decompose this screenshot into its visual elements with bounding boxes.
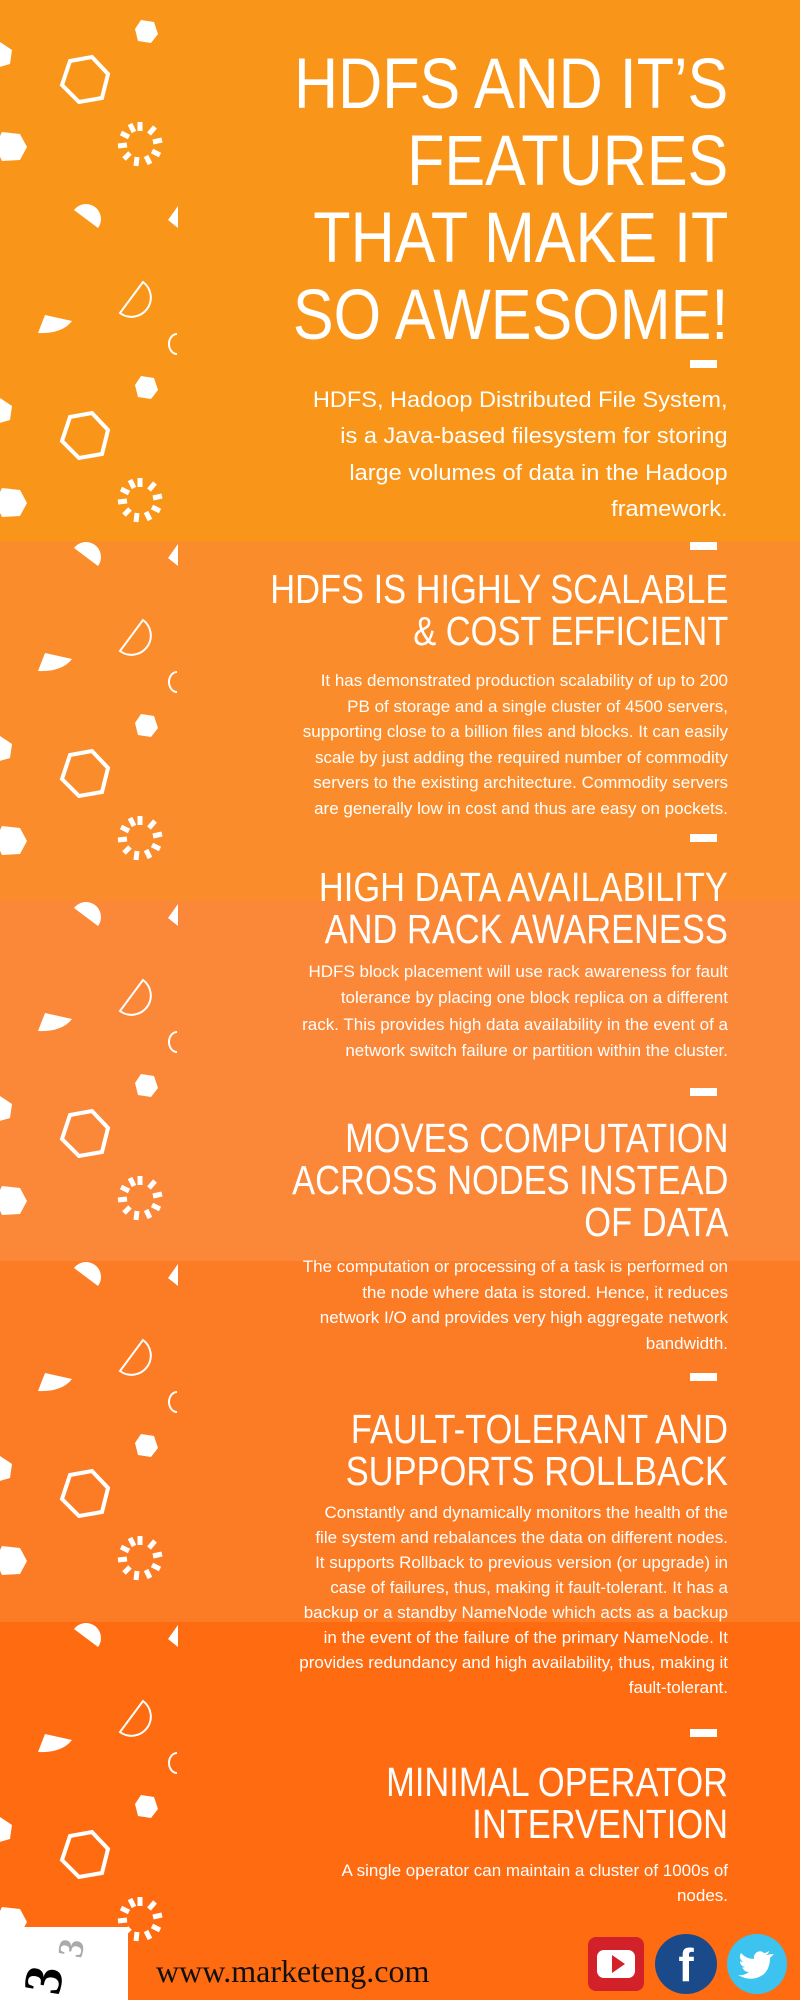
text: scalable: supporting close to a billion files and blocks. It can easily bbox=[303, 722, 728, 741]
text: scalable: PB of storage and a single cluster of 4500 servers, bbox=[347, 696, 728, 716]
section: computation: ACROSS NODES INSTEAD bbox=[292, 1157, 728, 1203]
text: availability: HDFS block placement will use rack awareness for fault bbox=[308, 962, 728, 981]
icon: twitter bbox=[727, 1934, 787, 1994]
section: fault tolerant: SUPPORTS ROLLBACK bbox=[346, 1448, 728, 1494]
title: HDFS AND IT’S bbox=[294, 45, 728, 124]
section: computation: MOVES COMPUTATION bbox=[345, 1115, 728, 1161]
text: minimal intervention: nodes. bbox=[677, 1886, 728, 1905]
text: fault tolerant: It supports Rollback to previous version (or upgrade) in bbox=[315, 1553, 728, 1572]
text: scalable: are generally low in cost and thus are easy on pockets. bbox=[314, 798, 728, 818]
text: availability: rack. This provides high data availability in the event of a bbox=[302, 1015, 728, 1034]
section: computation bbox=[292, 1115, 728, 1245]
intro text: large volumes of data in the Hadoop bbox=[350, 460, 728, 485]
text: computation bbox=[303, 1257, 728, 1353]
text: scalable: It has demonstrated production scalability of up to 200 bbox=[321, 671, 728, 690]
footer url: www.marketeng.com bbox=[156, 1953, 429, 1989]
text: availability bbox=[302, 962, 728, 1060]
footer logo bbox=[0, 1927, 128, 2000]
section: computation: OF DATA bbox=[584, 1199, 728, 1245]
text: availability: network switch failure or partition within the cluster. bbox=[345, 1041, 728, 1060]
icon: facebook: f bbox=[678, 1939, 694, 1991]
intro text: framework. bbox=[612, 496, 728, 521]
section: fault tolerant: FAULT-TOLERANT AND bbox=[351, 1406, 728, 1452]
text: computation: bandwidth. bbox=[646, 1334, 728, 1353]
decorative shape strip bbox=[0, 20, 178, 1942]
footer logo: 3 bbox=[50, 1936, 92, 1960]
section: minimal intervention: INTERVENTION bbox=[472, 1801, 728, 1847]
text: fault tolerant: fault-tolerant. bbox=[629, 1678, 728, 1697]
text: computation: network I/O and provides very high aggregate network bbox=[320, 1308, 728, 1327]
text: fault tolerant: case of failures, thus, making it fault-tolerant. It has a bbox=[330, 1578, 728, 1597]
title bbox=[293, 45, 728, 355]
background bands bbox=[0, 0, 800, 541]
text: fault tolerant bbox=[299, 1503, 728, 1697]
title: THAT MAKE IT bbox=[313, 199, 728, 278]
section: fault tolerant bbox=[346, 1406, 728, 1494]
section: scalable: & COST EFFICIENT bbox=[413, 608, 728, 654]
text: minimal intervention: A single operator can maintain a cluster of 1000s of bbox=[341, 1861, 728, 1880]
section: scalable: HDFS IS HIGHLY SCALABLE bbox=[270, 566, 728, 612]
intro text: HDFS, Hadoop Distributed File System, bbox=[313, 387, 728, 412]
section: minimal intervention: MINIMAL OPERATOR bbox=[386, 1759, 728, 1805]
title: FEATURES bbox=[407, 122, 728, 201]
text: fault tolerant: in the event of the failure of the primary NameNode. It bbox=[324, 1628, 728, 1647]
text: fault tolerant: provides redundancy and high availability, thus, making it bbox=[299, 1653, 728, 1672]
text: availability: tolerance by placing one block replica on a different bbox=[341, 988, 728, 1007]
text: computation: The computation or processing of a task is performed on bbox=[303, 1257, 728, 1276]
section: minimal intervention bbox=[386, 1759, 728, 1847]
text: fault tolerant: file system and rebalances the data on different nodes. bbox=[315, 1528, 728, 1547]
section: availability bbox=[319, 864, 728, 952]
section: availability: HIGH DATA AVAILABILITY bbox=[319, 864, 728, 910]
section: scalable bbox=[270, 566, 728, 654]
text: scalable: servers to the existing architecture. Commodity servers bbox=[313, 773, 728, 792]
text: fault tolerant: Constantly and dynamically monitors the health of the bbox=[324, 1503, 728, 1522]
text: computation: the node where data is stored. Hence, it reduces bbox=[362, 1283, 728, 1302]
intro text: is a Java-based filesystem for storing bbox=[341, 423, 728, 448]
text: scalable bbox=[303, 671, 728, 818]
section: availability: AND RACK AWARENESS bbox=[325, 906, 728, 952]
text: minimal intervention bbox=[341, 1861, 728, 1905]
title: SO AWESOME! bbox=[293, 276, 728, 355]
intro text bbox=[313, 387, 728, 521]
footer logo: 3 bbox=[12, 1961, 75, 1999]
text: fault tolerant: backup or a standby NameNode which acts as a backup bbox=[304, 1603, 728, 1622]
icon: facebook bbox=[655, 1934, 717, 1994]
icon: youtube bbox=[588, 1937, 644, 1991]
text: scalable: scale by just adding the required number of commodity bbox=[315, 748, 728, 766]
